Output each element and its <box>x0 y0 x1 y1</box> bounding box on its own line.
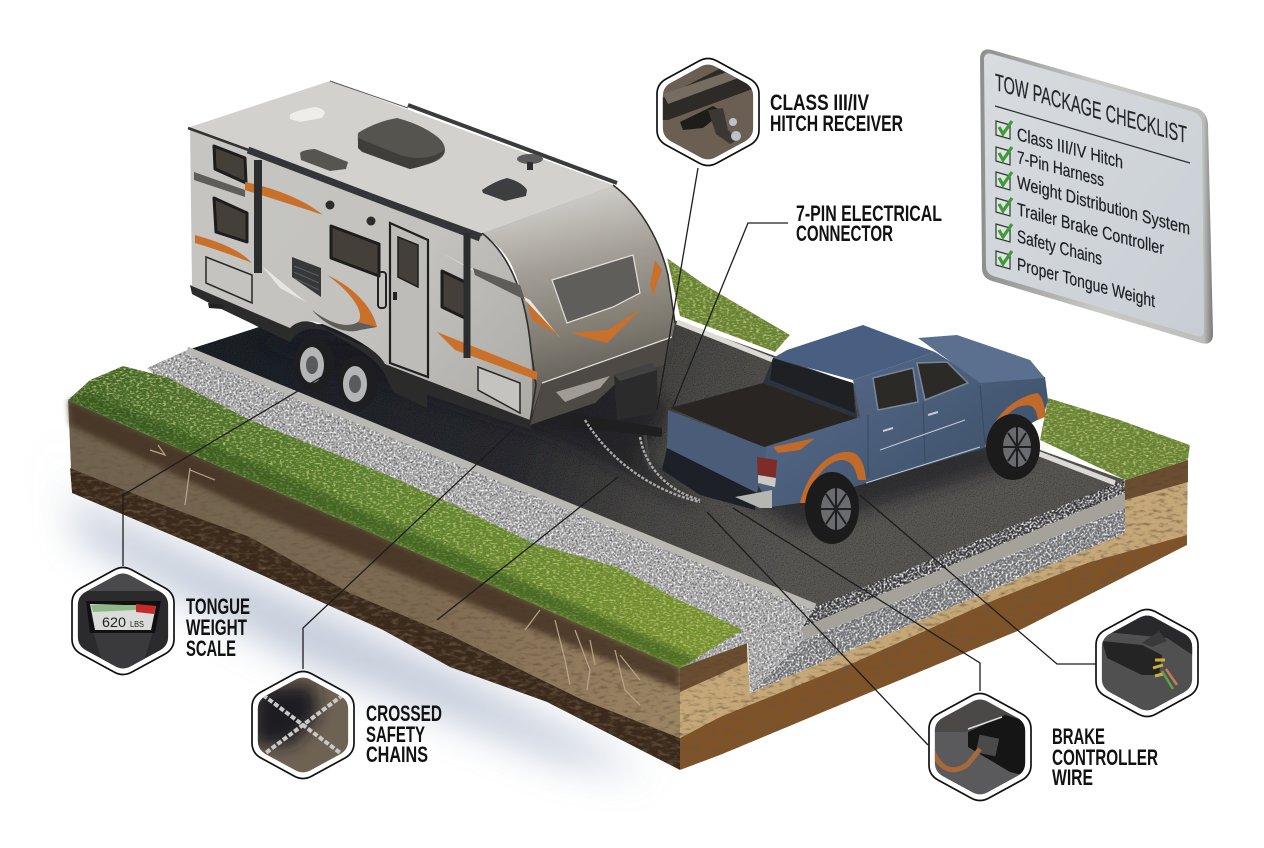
panel: tow package checklist <box>980 49 1213 344</box>
truck body side <box>757 352 1048 507</box>
road base layers <box>750 478 1125 693</box>
hexagon icon: 7-pin connector <box>1096 610 1198 716</box>
asphalt road <box>187 318 1125 607</box>
hexagon icon: scale gauge: LBS <box>130 620 144 629</box>
label: hitch receiver <box>770 90 903 136</box>
vehicle ground shadows <box>250 340 1040 530</box>
label: brake controller wire: CONTROLLER <box>1052 745 1158 770</box>
front window <box>552 255 640 323</box>
checklist item text: Safety Chains <box>1017 225 1102 269</box>
storage doors <box>206 257 520 413</box>
soil cross-section: left face <box>68 400 680 770</box>
callout: crossed safety chains <box>252 672 442 778</box>
taillight and bumper <box>735 457 777 508</box>
soil cross-section: right face <box>680 460 1188 770</box>
label: brake controller wire: WIRE <box>1052 765 1093 790</box>
hexagon icon: crossed chains <box>252 672 354 778</box>
checklist item text: Class III/IV Hitch <box>1017 123 1123 173</box>
checkmarks <box>996 121 1012 269</box>
label: tongue weight scale: SCALE <box>186 636 236 661</box>
callout: hitch receiver <box>657 58 903 166</box>
truck bed <box>670 383 857 447</box>
trailer <box>188 81 675 470</box>
label: crossed safety chains: CHAINS <box>366 742 428 767</box>
truck door windows <box>873 362 968 410</box>
checklist item text <box>1017 123 1190 311</box>
checklist item text: 7-Pin Harness <box>1017 146 1104 190</box>
label: hitch receiver: HITCH RECEIVER <box>770 111 903 136</box>
trailer front cap <box>482 185 675 422</box>
trailer underbody <box>190 285 532 430</box>
checklist item text: Weight Distribution System <box>1017 171 1190 239</box>
callout: brake controller wire <box>929 694 1158 800</box>
roots <box>150 445 640 705</box>
grass: front <box>68 366 743 668</box>
label: brake controller wire: BRAKE <box>1052 724 1105 749</box>
roof fixtures <box>290 107 543 201</box>
road edge lines <box>187 322 1115 607</box>
trailer roof <box>190 81 613 233</box>
hexagon icon: hitch <box>657 58 759 166</box>
safety chains <box>585 420 700 502</box>
gravel strip <box>147 350 815 693</box>
label: tongue weight scale <box>186 594 250 661</box>
pickup truck <box>662 325 1048 544</box>
ground shadow <box>50 430 650 775</box>
trailer wheels <box>294 337 378 410</box>
white decals <box>262 252 560 338</box>
truck door lines and handles <box>866 385 985 483</box>
checklist item text: Proper Tongue Weight <box>1017 253 1155 311</box>
truck tailgate <box>667 410 767 493</box>
trailer side wall <box>190 127 536 420</box>
label: crossed safety chains: CROSSED <box>366 701 442 726</box>
side vent <box>292 257 321 297</box>
wall ports <box>326 200 376 226</box>
propane box and tongue <box>570 363 662 470</box>
label: 7-pin electrical connector: CONNECTOR <box>796 221 893 246</box>
label: tongue weight scale: WEIGHT <box>186 615 247 640</box>
trailer windows <box>214 146 467 319</box>
label: hitch receiver: CLASS III/IV <box>770 90 869 115</box>
truck cab roof <box>773 325 935 380</box>
label: crossed safety chains: SAFETY <box>366 722 425 747</box>
leader lines <box>123 168 1096 745</box>
sign face <box>984 54 1204 336</box>
label: 7-pin electrical connector: 7-PIN ELECTRICAL <box>796 201 942 226</box>
callout: tongue weight scale <box>72 568 250 674</box>
label: brake controller wire <box>1052 724 1158 790</box>
hexagon icon: brake wire <box>929 694 1031 800</box>
truck wheels <box>805 414 1040 544</box>
label: tongue weight scale: TONGUE <box>186 594 250 619</box>
hexagon icon: scale gauge: 620 <box>102 614 126 630</box>
checklist divider <box>995 106 1190 163</box>
stabilizer jack <box>208 303 224 309</box>
gray decals <box>194 172 525 331</box>
truck rear glass <box>770 358 855 413</box>
label: crossed safety chains <box>366 701 442 767</box>
grass: back <box>667 258 1190 480</box>
front carbon panel <box>530 337 672 425</box>
truck hood <box>918 335 1045 383</box>
truck cab rear wall <box>763 358 857 418</box>
awning <box>248 150 480 358</box>
checklist item text: Trailer Brake Controller <box>1017 198 1164 259</box>
trailer door <box>378 223 428 377</box>
label: 7-pin electrical connector <box>796 201 942 246</box>
orange decals <box>195 182 662 380</box>
orange fender flares <box>773 393 1045 503</box>
sign frame <box>980 49 1213 344</box>
hexagon icon: scale gauge <box>72 568 174 674</box>
